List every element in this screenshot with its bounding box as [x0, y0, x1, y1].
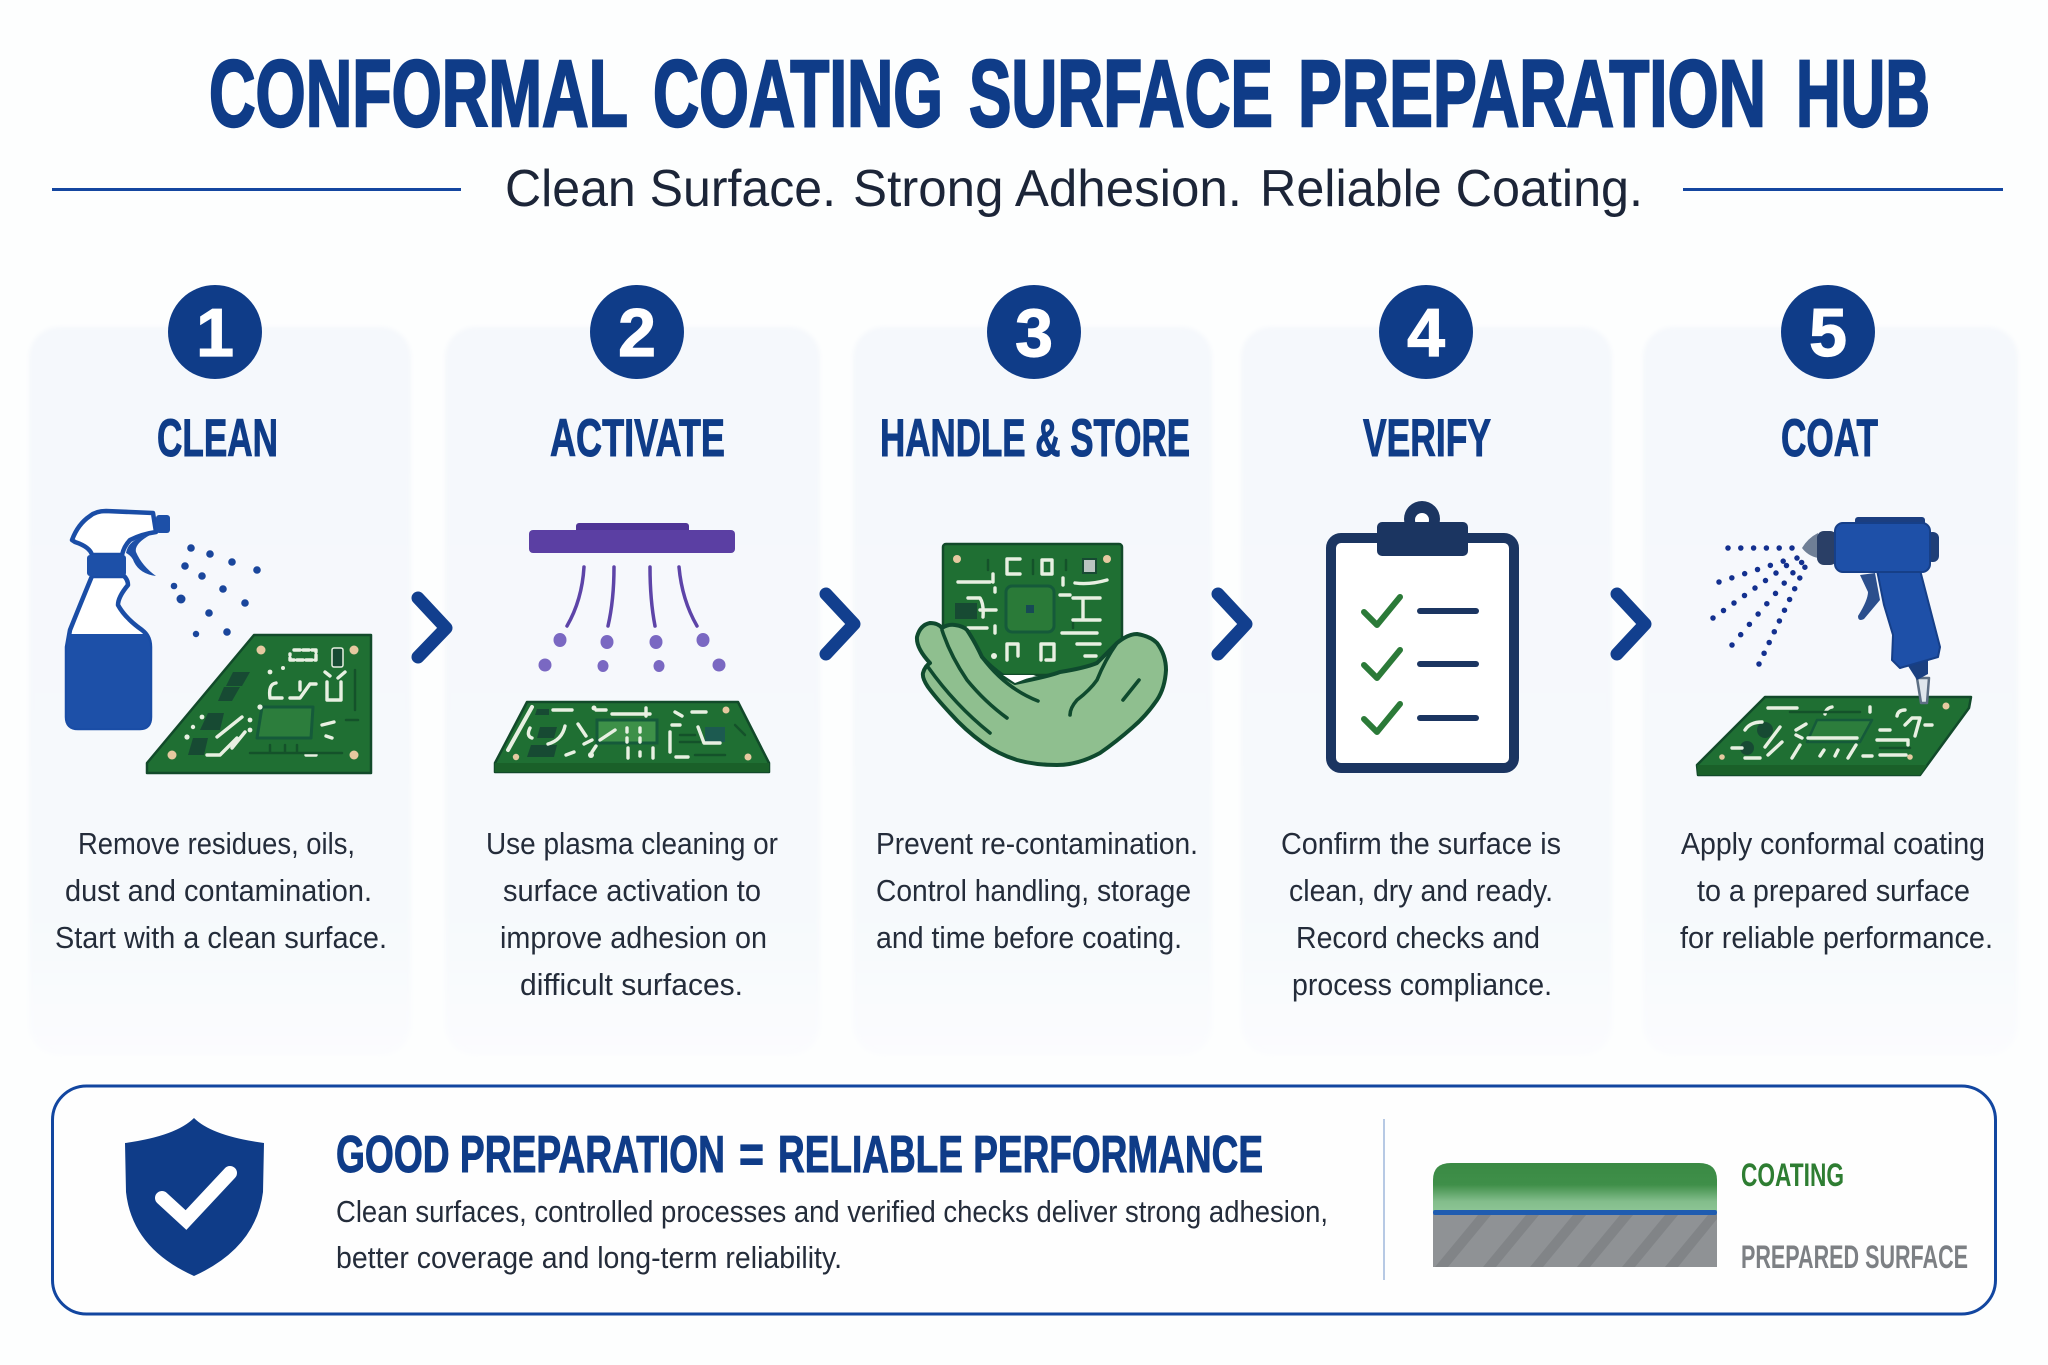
arrow 3 to 4	[1218, 594, 1246, 654]
number badge 3	[987, 285, 1081, 379]
description verify: process compliance.	[1292, 967, 1552, 1002]
icon: gloved hand	[917, 623, 1166, 765]
banner heading: GOOD PREPARATION	[336, 1126, 725, 1184]
panel: summary banner	[52, 1086, 1996, 1314]
heading coat: COAT	[1781, 409, 1878, 468]
icon: circuit board	[147, 635, 371, 773]
number badge 3: 3	[1015, 295, 1053, 371]
label coating: COATING	[1741, 1157, 1844, 1193]
banner text: better coverage and long-term reliability.	[336, 1240, 842, 1275]
description coat: for reliable performance.	[1680, 920, 1993, 955]
description activate: improve adhesion on	[500, 920, 767, 955]
panel: step 4 verify	[1241, 285, 1612, 1055]
description clean: Start with a clean surface.	[55, 920, 387, 955]
number badge 2: 2	[618, 295, 656, 371]
check row 1	[1364, 597, 1476, 625]
description handle and store: and time before coating.	[876, 920, 1182, 955]
heading clean: CLEAN	[157, 409, 278, 468]
title: COATING	[653, 41, 943, 147]
description clean: Remove residues, oils,	[78, 826, 355, 861]
subtitle with side rules: Clean Surface.	[505, 160, 836, 218]
description coat: Apply conformal coating	[1681, 826, 1985, 861]
number badge 5	[1781, 285, 1875, 379]
description clean	[55, 826, 387, 955]
description activate: difficult surfaces.	[520, 967, 743, 1002]
description handle and store: Prevent re-contamination.	[876, 826, 1198, 861]
title	[209, 41, 1930, 147]
icon: spray bottle	[67, 511, 170, 728]
description verify: Confirm the surface is	[1281, 826, 1561, 861]
description activate: Use plasma cleaning or	[486, 826, 778, 861]
panel: step 1 clean	[29, 285, 411, 1055]
heading verify: VERIFY	[1363, 409, 1491, 468]
icon: circuit board	[1697, 697, 1971, 775]
diagram: coating layers	[1433, 1163, 1717, 1267]
icon: plasma streams	[538, 567, 726, 672]
number badge 2	[590, 285, 684, 379]
subtitle with side rules: Strong Adhesion.	[853, 160, 1242, 218]
icon: plasma head	[529, 523, 735, 553]
icon: circuit board	[495, 702, 769, 772]
panel: step 3 handle and store	[853, 285, 1212, 1055]
arrow 4 to 5	[1617, 594, 1645, 654]
banner heading	[336, 1126, 1263, 1184]
icon: clipboard	[1331, 501, 1514, 768]
heading handle and store: HANDLE & STORE	[880, 409, 1190, 468]
panel: step 2 activate	[445, 285, 820, 1055]
banner text: Clean surfaces, controlled processes and verified checks deliver strong adhesion,	[336, 1194, 1328, 1229]
description coat: to a prepared surface	[1697, 873, 1970, 908]
description verify: Record checks and	[1296, 920, 1540, 955]
icon: spray droplets	[171, 544, 261, 637]
title: PREPARATION	[1298, 41, 1766, 147]
description verify	[1281, 826, 1561, 1002]
banner heading: =	[739, 1126, 764, 1184]
title: SURFACE	[969, 41, 1273, 147]
banner heading: RELIABLE PERFORMANCE	[778, 1126, 1263, 1184]
number badge 4: 4	[1407, 295, 1445, 371]
description coat	[1680, 826, 1993, 955]
number badge 1: 1	[196, 295, 234, 371]
icon: circuit board in hand	[943, 544, 1122, 675]
banner text	[336, 1194, 1328, 1275]
icon: spray gun	[1802, 517, 1940, 703]
icon: shield with check	[125, 1118, 264, 1276]
icon: spray pattern	[1713, 548, 1805, 664]
number badge 5: 5	[1809, 295, 1847, 371]
description activate: surface activation to	[503, 873, 761, 908]
heading activate: ACTIVATE	[550, 409, 725, 468]
arrow 2 to 3	[826, 594, 854, 654]
description verify: clean, dry and ready.	[1289, 873, 1553, 908]
description clean: dust and contamination.	[65, 873, 372, 908]
number badge 1	[168, 285, 262, 379]
title: CONFORMAL	[209, 41, 628, 147]
subtitle with side rules: Reliable Coating.	[1260, 160, 1643, 218]
description handle and store	[876, 826, 1198, 955]
panel: step 5 coat	[1643, 285, 2018, 1055]
subtitle with side rules	[52, 160, 2003, 218]
number badge 4	[1379, 285, 1473, 379]
description activate	[486, 826, 778, 1002]
title: HUB	[1796, 41, 1930, 147]
arrow 1 to 2	[418, 598, 446, 657]
check row 3	[1364, 704, 1476, 732]
description handle and store: Control handling, storage	[876, 873, 1191, 908]
check row 2	[1364, 650, 1476, 678]
